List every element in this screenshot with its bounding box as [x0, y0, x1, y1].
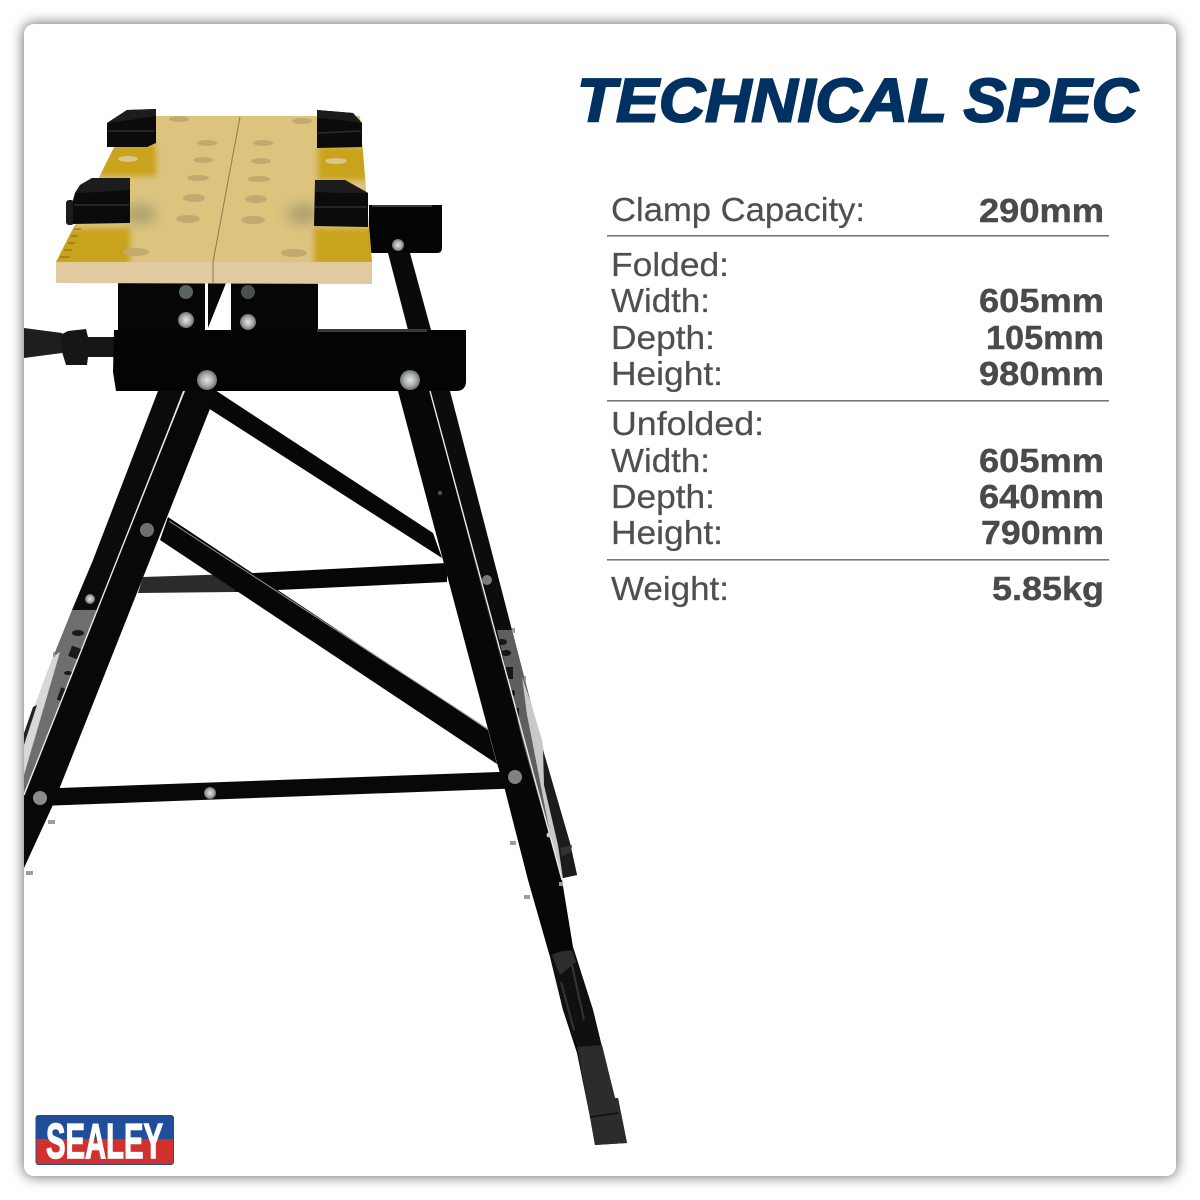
vice jaw: front right: [314, 180, 368, 227]
folded width: Width:: [611, 282, 710, 319]
table top: [45, 116, 378, 284]
unfolded width: [611, 442, 1104, 479]
yellow surface shading: [45, 144, 378, 266]
centre seam: [213, 117, 240, 283]
top surface: [56, 116, 372, 262]
folded width: [611, 282, 1104, 319]
lower diagonal brace: [160, 517, 497, 764]
unfolded height: Height:: [611, 514, 723, 551]
folded height: [611, 355, 1104, 392]
folded heading: Folded:: [611, 246, 729, 283]
unfolded depth: [611, 478, 1104, 515]
clamp handle: [24, 328, 114, 365]
ruler marks: [60, 229, 81, 257]
rear horizontal bar: [138, 563, 447, 593]
folded depth: 105mm: [986, 319, 1104, 356]
clamp capacity row: Clamp Capacity:: [611, 191, 865, 228]
weight row: Weight:: [611, 570, 729, 607]
logo: Sealey: [36, 1115, 174, 1169]
clamp capacity row: 290mm: [979, 192, 1104, 229]
peg holes: [118, 116, 347, 257]
folded depth: Depth:: [611, 319, 715, 356]
vice jaw: back right: [317, 110, 362, 148]
front left leg: [24, 391, 217, 868]
unfolded depth: 640mm: [979, 478, 1104, 515]
front right leg and foot: [398, 391, 627, 1145]
unfolded height: [611, 514, 1104, 551]
folded height: 980mm: [979, 355, 1104, 392]
folded depth: [611, 319, 1104, 356]
rear left leg with adjustment plate: [24, 391, 183, 793]
unfolded depth: Depth:: [611, 478, 715, 515]
vice jaw: front left: [66, 178, 130, 225]
front edge of boards: [56, 262, 372, 284]
clamp capacity row: [611, 191, 1104, 229]
product photo: folding workbench: [24, 109, 627, 1145]
under-table brackets: [118, 283, 318, 330]
unfolded heading: Unfolded:: [611, 405, 764, 442]
main cross rail: [113, 329, 466, 391]
unfolded width: 605mm: [979, 442, 1104, 479]
folded height: Height:: [611, 355, 723, 392]
bottom horizontal bar: [32, 770, 525, 806]
glossy foot sleeve: [550, 950, 602, 1048]
logo: Sealey: SEALEY: [46, 1115, 163, 1169]
rear right bracket: [369, 205, 442, 253]
weight row: 5.85kg: [992, 570, 1104, 607]
upper diagonal brace: [208, 390, 442, 558]
adjustment plate right: [497, 630, 550, 839]
weight row: [611, 570, 1104, 607]
unfolded width: Width:: [611, 442, 710, 479]
rear right leg: [388, 253, 577, 880]
title: TECHNICAL SPEC: [577, 66, 1140, 136]
vice jaw: back left: [107, 109, 156, 147]
small fixing pins: [26, 628, 563, 899]
folded width: 605mm: [979, 282, 1104, 319]
unfolded height: 790mm: [981, 514, 1104, 551]
spec table: [607, 191, 1109, 607]
rubber foot: [577, 1045, 627, 1145]
